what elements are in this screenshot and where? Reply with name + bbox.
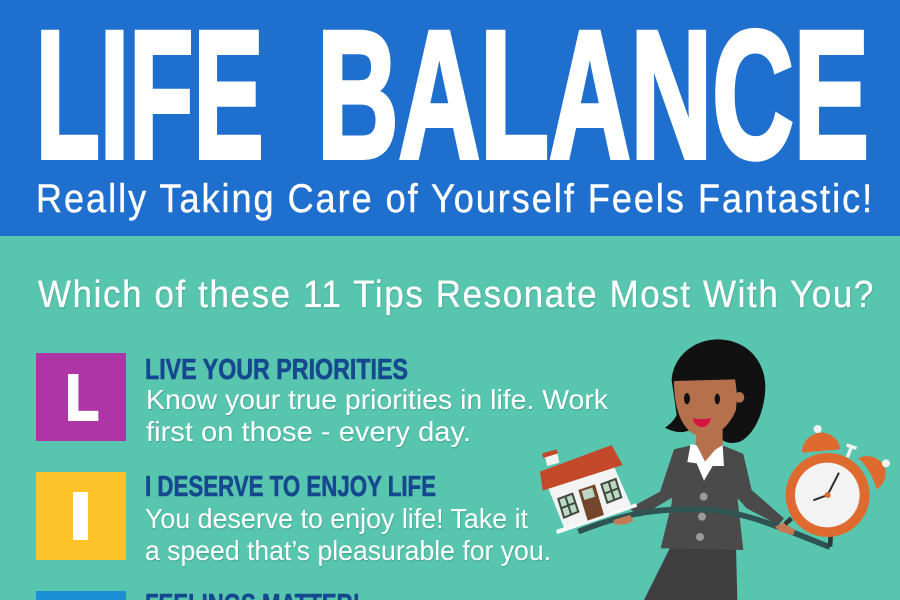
tip body [145, 503, 551, 566]
letter tile: L [36, 353, 126, 441]
clock stem [847, 445, 857, 457]
header banner [0, 0, 900, 236]
tip heading: I DESERVE TO ENJOY LIFE [145, 471, 436, 503]
letter tile: L: L [66, 362, 99, 434]
buttons [696, 493, 708, 541]
hair [665, 339, 765, 443]
neck [696, 430, 723, 473]
section heading: Which of these 11 Tips Resonate Most With You? [38, 273, 873, 315]
balance bar [578, 509, 830, 547]
tip body: Know your true priorities in life. Work [146, 384, 609, 415]
chimney [545, 453, 559, 466]
tip body: first on those - every day. [146, 416, 471, 447]
illustration: woman balancing home and clock [540, 339, 890, 600]
tip body: a speed that’s pleasurable for you. [145, 535, 551, 566]
house walls [548, 465, 632, 530]
house [540, 445, 637, 534]
clock bells [802, 433, 840, 453]
tip body [146, 384, 609, 447]
clock [785, 425, 890, 547]
tip body: You deserve to enjoy life! Take it [145, 503, 528, 534]
collar [687, 444, 724, 481]
tip heading: LIVE YOUR PRIORITIES [145, 354, 408, 386]
clock feet [785, 518, 831, 547]
mouth [693, 418, 711, 427]
letter tile: I [36, 472, 126, 560]
face [674, 379, 737, 437]
eyes [684, 393, 720, 404]
subtitle: Really Taking Care of Yourself Feels Fantastic! [36, 177, 872, 221]
clock hands [813, 473, 839, 500]
tip I [36, 471, 551, 566]
hands [613, 515, 795, 535]
arms [629, 447, 784, 525]
door [578, 484, 604, 521]
jacket [661, 444, 743, 550]
clock body [786, 453, 870, 537]
ear [734, 392, 744, 403]
house base [556, 503, 637, 534]
tip F [36, 589, 360, 600]
windows [558, 494, 578, 518]
letter tile: F [36, 591, 126, 600]
skirt [644, 547, 737, 600]
tip L [36, 353, 609, 447]
roof [540, 445, 623, 491]
